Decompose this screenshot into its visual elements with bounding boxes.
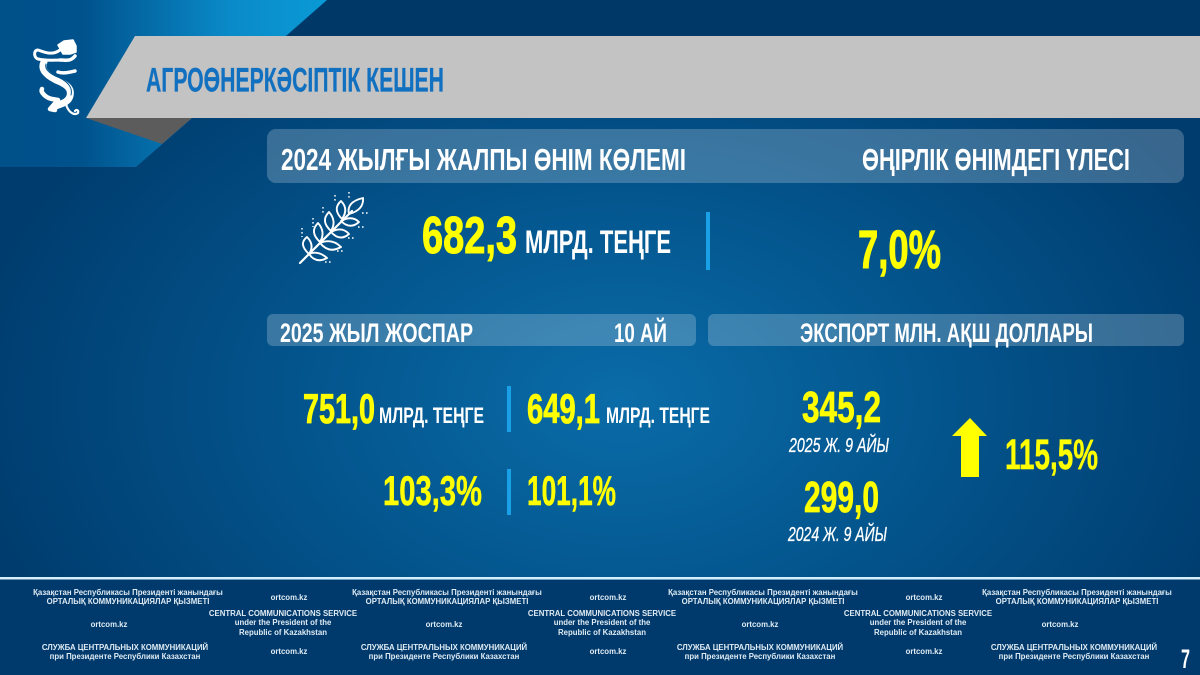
- ten month values: 101,1%: [527, 467, 616, 514]
- plan label: 2025 ЖЫЛ ЖОСПАР: [280, 318, 473, 348]
- months label: 10 АЙ: [614, 317, 667, 348]
- icon: wheat: [300, 192, 368, 263]
- footer text: Қазақстан Республикасы Президенті жанындағы: [33, 588, 223, 597]
- heading: 2024 output: 2024 ЖЫЛҒЫ ЖАЛПЫ ӨНІМ КӨЛЕМІ: [281, 142, 686, 177]
- ten month values: МЛРД. ТЕҢГЕ: [606, 403, 710, 428]
- plan values: [303, 385, 484, 514]
- footer text: ОРТАЛЫҚ КОММУНИКАЦИЯЛАР ҚЫЗМЕТІ: [366, 597, 528, 606]
- panel: gross output header: [267, 129, 1184, 183]
- footer text: [33, 588, 1172, 661]
- footer text: ortcom.kz: [271, 593, 308, 602]
- top navy band: [288, 0, 1200, 36]
- footer text: ortcom.kz: [906, 593, 943, 602]
- footer text: Қазақстан Республикасы Президенті жанындағы: [352, 588, 542, 597]
- export values: 345,2: [802, 383, 881, 432]
- footer text: СЛУЖБА ЦЕНТРАЛЬНЫХ КОММУНИКАЦИЙ: [677, 643, 844, 652]
- footer text: при Президенте Республики Казахстан: [685, 652, 836, 661]
- banner shadow: [86, 118, 192, 144]
- plan values: МЛРД. ТЕҢГЕ: [379, 403, 484, 428]
- footer text: ОРТАЛЫҚ КОММУНИКАЦИЯЛАР ҚЫЗМЕТІ: [996, 597, 1158, 606]
- footer text: СЛУЖБА ЦЕНТРАЛЬНЫХ КОММУНИКАЦИЙ: [42, 643, 209, 652]
- footer text: under the President of the: [554, 618, 651, 627]
- footer text: Қазақстан Республикасы Президенті жанындағы: [668, 588, 858, 597]
- footer text: under the President of the: [235, 618, 332, 627]
- value: regional share: 7,0%: [858, 220, 941, 280]
- footer text: Republic of Kazakhstan: [239, 628, 327, 637]
- footer text: ОРТАЛЫҚ КОММУНИКАЦИЯЛАР ҚЫЗМЕТІ: [47, 597, 209, 606]
- ten month values: [527, 385, 710, 514]
- arrow: growth: [952, 418, 987, 477]
- footer text: CENTRAL COMMUNICATIONS SERVICE: [209, 609, 357, 618]
- export values: 299,0: [804, 473, 879, 522]
- footer text: при Президенте Республики Казахстан: [50, 652, 201, 661]
- footer text: СЛУЖБА ЦЕНТРАЛЬНЫХ КОММУНИКАЦИЙ: [991, 643, 1158, 652]
- footer text: ortcom.kz: [742, 620, 779, 629]
- footer text: Republic of Kazakhstan: [874, 628, 962, 637]
- footer text: ortcom.kz: [91, 620, 128, 629]
- plan values: 103,3%: [383, 467, 482, 514]
- plan values: 751,0: [303, 385, 375, 432]
- corner accent shape: [0, 0, 327, 167]
- footer text: СЛУЖБА ЦЕНТРАЛЬНЫХ КОММУНИКАЦИЙ: [361, 643, 528, 652]
- title banner: [86, 36, 1200, 118]
- page number: 7: [1181, 644, 1190, 674]
- ten month values: 649,1: [527, 385, 600, 432]
- unit: МЛРД. ТЕҢГЕ: [525, 224, 671, 260]
- footer text: ortcom.kz: [271, 647, 308, 656]
- divider: [706, 212, 710, 270]
- footer text: under the President of the: [870, 618, 967, 627]
- dividers: [507, 386, 511, 515]
- footer text: при Президенте Республики Казахстан: [369, 652, 520, 661]
- footer text: ortcom.kz: [426, 620, 463, 629]
- footer text: ortcom.kz: [1042, 620, 1079, 629]
- panel: export header: [708, 314, 1184, 348]
- title: АГРОӨНЕРКӘСІПТІК КЕШЕН: [146, 62, 444, 100]
- footer text: ortcom.kz: [590, 647, 627, 656]
- export values: [787, 383, 889, 546]
- footer line: [0, 577, 1200, 580]
- footer text: при Президенте Республики Казахстан: [999, 652, 1150, 661]
- footer text: CENTRAL COMMUNICATIONS SERVICE: [844, 609, 992, 618]
- value: export growth: 115,5%: [1005, 431, 1098, 479]
- icon: snow leopard logo: [35, 40, 78, 114]
- value: gross output: 682,3: [422, 207, 517, 265]
- footer text: CENTRAL COMMUNICATIONS SERVICE: [528, 609, 676, 618]
- panel: plan header: [267, 314, 696, 348]
- export values: 2025 Ж. 9 АЙЫ: [788, 434, 889, 457]
- footer band: [0, 580, 1200, 675]
- footer text: Republic of Kazakhstan: [558, 628, 646, 637]
- footer text: ОРТАЛЫҚ КОММУНИКАЦИЯЛАР ҚЫЗМЕТІ: [682, 597, 844, 606]
- footer text: ortcom.kz: [906, 647, 943, 656]
- footer text: Қазақстан Республикасы Президенті жанындағы: [982, 588, 1172, 597]
- value: gross output: [422, 207, 671, 265]
- export values: 2024 Ж. 9 АЙЫ: [787, 523, 887, 546]
- footer text: ortcom.kz: [590, 593, 627, 602]
